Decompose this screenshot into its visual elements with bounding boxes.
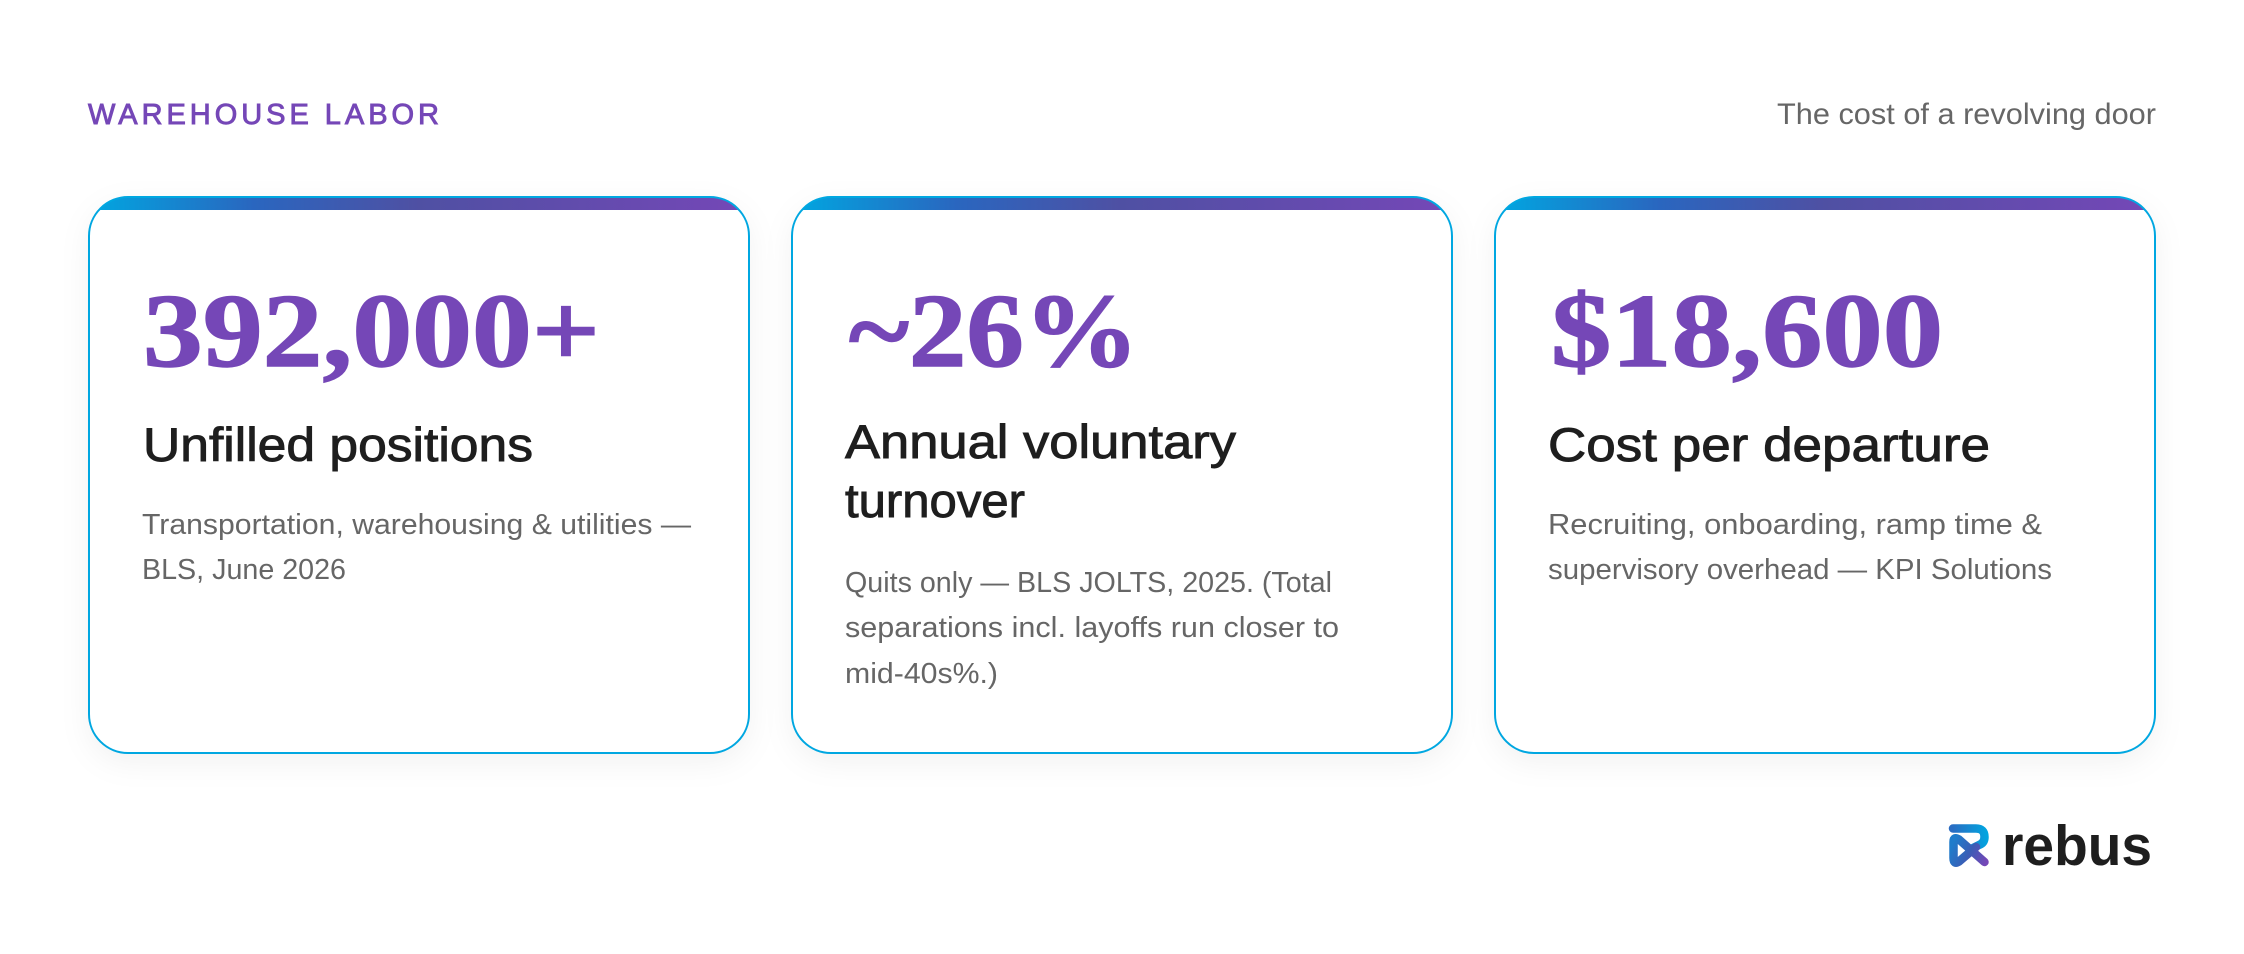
description xyxy=(142,509,691,586)
card title: turnover xyxy=(845,474,1025,527)
description xyxy=(845,567,1339,690)
icon: rebus mark xyxy=(1953,828,1984,863)
description xyxy=(1548,509,2052,586)
card title: Annual voluntary xyxy=(845,415,1237,468)
tagline: The cost of a revolving door xyxy=(1777,98,2156,131)
description: Transportation, warehousing & utilities — xyxy=(142,509,691,541)
stat value: 392,000+ xyxy=(143,272,600,389)
card title: Cost per departure xyxy=(1548,418,1990,471)
eyebrow heading: WAREHOUSE LABOR xyxy=(88,99,439,131)
description: supervisory overhead — KPI Solutions xyxy=(1548,554,2052,586)
stat value: ~26% xyxy=(849,272,1139,389)
panel: cost per departure xyxy=(1495,197,2155,753)
logo: rebus xyxy=(1953,814,2152,878)
wordmark: rebus xyxy=(2002,814,2152,878)
description: BLS, June 2026 xyxy=(142,554,346,586)
panel: voluntary turnover xyxy=(792,197,1452,753)
description: Recruiting, onboarding, ramp time & xyxy=(1548,509,2042,541)
stat value: $18,600 xyxy=(1551,272,1943,389)
description: separations incl. layoffs run closer to xyxy=(845,612,1339,644)
card title: Unfilled positions xyxy=(143,418,533,471)
description: Quits only — BLS JOLTS, 2025. (Total xyxy=(845,567,1332,599)
card title xyxy=(845,415,1237,527)
description: mid-40s%.) xyxy=(845,658,998,690)
panel: unfilled positions xyxy=(89,197,749,753)
